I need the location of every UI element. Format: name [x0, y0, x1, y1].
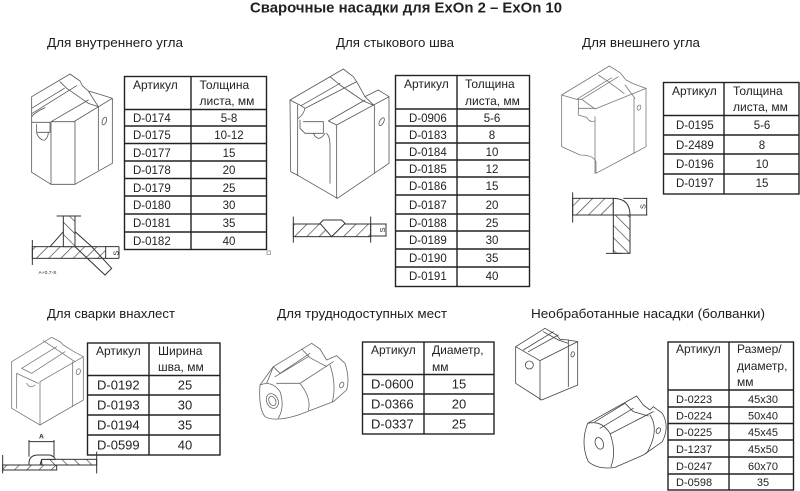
table rows: 50x40 — [748, 410, 778, 422]
panel: butt weld — [290, 35, 530, 286]
diagram: fillet weld — [32, 216, 120, 276]
table rows: 25 — [452, 416, 466, 432]
diagram: fillet weld: A+0,7-S — [38, 270, 57, 276]
table header: мм — [432, 360, 448, 374]
table grid — [124, 76, 266, 250]
table header — [672, 84, 788, 114]
table header: Размер/ — [737, 342, 782, 356]
table rows: 30 — [223, 200, 235, 212]
heading: hard to reach: Для труднодоступных мест — [277, 306, 447, 321]
table rows: D-0186 — [409, 181, 447, 193]
table grid — [362, 342, 494, 434]
table rows: D-0181 — [133, 218, 171, 230]
table rows: D-0196 — [676, 159, 714, 171]
table: lap weld — [87, 343, 220, 455]
panel: outer corner — [562, 35, 799, 253]
diagram: butt weld — [293, 217, 387, 243]
diagram: lap weld: A — [39, 433, 44, 440]
table rows: D-0223 — [676, 394, 712, 406]
table rows: D-0177 — [133, 148, 171, 160]
table rows: D-0598 — [676, 477, 712, 489]
heading: butt weld: Для стыкового шва — [336, 35, 455, 50]
table rows — [676, 394, 778, 489]
table rows: 45x45 — [748, 427, 778, 439]
icon: cylindrical nozzle — [260, 343, 348, 419]
table rows: D-0187 — [409, 200, 447, 212]
table rows: 25 — [178, 378, 192, 392]
table header: Артикул — [672, 84, 717, 98]
diagram: corner weld — [573, 192, 647, 253]
icon: round blank — [584, 396, 666, 468]
heading: lap weld: Для сварки внахлест — [47, 306, 175, 321]
table rows: 10 — [756, 159, 768, 171]
table rows: D-0189 — [409, 235, 447, 247]
table rows: D-0194 — [97, 418, 140, 432]
icon: square blank — [516, 328, 578, 400]
heading: inner corner: Для внутреннего угла — [47, 35, 184, 50]
table: butt weld — [395, 75, 530, 286]
table rows: 5-8 — [221, 113, 237, 125]
table header: Артикул — [371, 343, 416, 357]
diagram: fillet weld: S — [111, 251, 120, 256]
table header: Толщина — [465, 77, 515, 91]
table header: Артикул — [404, 77, 449, 91]
table rows: D-0175 — [133, 130, 171, 142]
table rows — [676, 120, 770, 190]
table grid — [87, 343, 220, 455]
table rows: 12 — [486, 164, 498, 176]
table: inner corner — [124, 76, 266, 250]
diagram: butt weld: S — [378, 227, 387, 232]
table rows: 5-6 — [484, 113, 500, 125]
table header: Диаметр, — [432, 343, 484, 357]
table grid — [395, 75, 530, 286]
table rows: 25 — [486, 218, 498, 230]
table rows: 40 — [178, 438, 192, 452]
table rows: D-0180 — [133, 200, 171, 212]
table rows: 45x30 — [748, 394, 778, 406]
panel: hard to reach — [260, 306, 494, 434]
panel: lap weld — [3, 306, 220, 473]
table rows: D-0225 — [676, 427, 712, 439]
table rows: D-1237 — [676, 444, 712, 456]
table rows — [409, 113, 500, 283]
table header: шва, мм — [158, 360, 204, 374]
table rows: D-0182 — [133, 236, 171, 248]
table rows: 15 — [223, 148, 235, 160]
table rows — [133, 113, 244, 248]
table rows: 15 — [452, 376, 466, 392]
table rows: 25 — [223, 183, 235, 195]
table grid — [663, 82, 799, 194]
table resize handle — [267, 251, 270, 254]
table rows: 20 — [486, 200, 498, 212]
table rows — [371, 376, 466, 432]
table rows: 15 — [756, 178, 768, 190]
table header — [96, 344, 204, 374]
panel: blanks — [516, 306, 794, 490]
table rows: D-0191 — [409, 271, 447, 283]
table header: Артикул — [96, 344, 141, 358]
icon: outer corner nozzle — [562, 66, 646, 173]
table rows: D-0906 — [409, 113, 447, 125]
table rows: 20 — [223, 165, 235, 177]
table rows: 35 — [178, 418, 192, 432]
table rows: 20 — [452, 396, 466, 412]
table header: листа, мм — [733, 100, 788, 114]
table header — [404, 77, 520, 108]
table rows: D-0193 — [97, 398, 140, 412]
table rows: D-0224 — [676, 410, 712, 422]
table rows: 60x70 — [748, 461, 778, 473]
table rows — [97, 378, 192, 452]
table header — [371, 343, 484, 374]
table rows: 35 — [486, 253, 498, 265]
table rows: D-0178 — [133, 165, 171, 177]
table grid — [668, 342, 794, 490]
table header: листа, мм — [200, 94, 254, 108]
table rows: D-0179 — [133, 183, 171, 195]
table header: Артикул — [133, 78, 178, 92]
table rows: D-0185 — [409, 164, 447, 176]
table rows: 5-6 — [754, 120, 770, 132]
table header: листа, мм — [465, 94, 520, 108]
table rows: 35 — [223, 218, 235, 230]
table rows: D-2489 — [676, 140, 714, 152]
table rows: D-0366 — [371, 396, 414, 412]
heading: outer corner: Для внешнего угла — [582, 35, 701, 50]
table rows: D-0197 — [676, 178, 714, 190]
table rows: D-0600 — [371, 376, 414, 392]
table header: Артикул — [676, 342, 721, 356]
table header: Толщина — [733, 84, 783, 98]
table rows: D-0188 — [409, 218, 447, 230]
table rows: D-0190 — [409, 253, 447, 265]
table rows: 40 — [223, 236, 235, 248]
table rows: D-0184 — [409, 147, 447, 159]
table rows: 15 — [486, 181, 498, 193]
table rows: 8 — [489, 130, 495, 142]
table: blanks — [668, 342, 794, 490]
table header: Ширина — [158, 344, 203, 358]
table rows: D-0195 — [676, 120, 714, 132]
table rows: D-0174 — [133, 113, 171, 125]
icon: inner corner nozzle — [32, 74, 112, 184]
icon: butt weld nozzle — [290, 69, 389, 198]
table header — [676, 342, 787, 389]
table header: диаметр, — [737, 359, 787, 373]
table rows: 45x50 — [748, 444, 778, 456]
table rows: D-0599 — [97, 438, 140, 452]
table header: Толщина — [200, 78, 250, 92]
table rows: 30 — [486, 235, 498, 247]
heading: blanks: Необработанные насадки (болванки) — [531, 306, 765, 321]
table header: мм — [737, 375, 754, 389]
title: Сварочные насадки для ExOn 2 – ExOn 10 — [250, 0, 562, 16]
panel: inner corner — [32, 35, 271, 276]
table rows: D-0247 — [676, 461, 712, 473]
table rows: 40 — [486, 271, 498, 283]
table header — [133, 78, 254, 108]
table rows: 8 — [759, 140, 765, 152]
table rows: 10-12 — [214, 130, 244, 142]
table: hard to reach — [362, 342, 494, 434]
table rows: 10 — [486, 147, 498, 159]
table: outer corner — [663, 82, 799, 194]
table rows: 35 — [757, 477, 769, 489]
diagram: corner weld: S — [638, 204, 647, 209]
table rows: 30 — [178, 398, 192, 412]
table rows: D-0192 — [97, 378, 140, 392]
table rows: D-0337 — [371, 416, 414, 432]
icon: lap weld nozzle — [12, 337, 83, 425]
table rows: D-0183 — [409, 130, 447, 142]
diagram: lap weld — [3, 433, 97, 473]
